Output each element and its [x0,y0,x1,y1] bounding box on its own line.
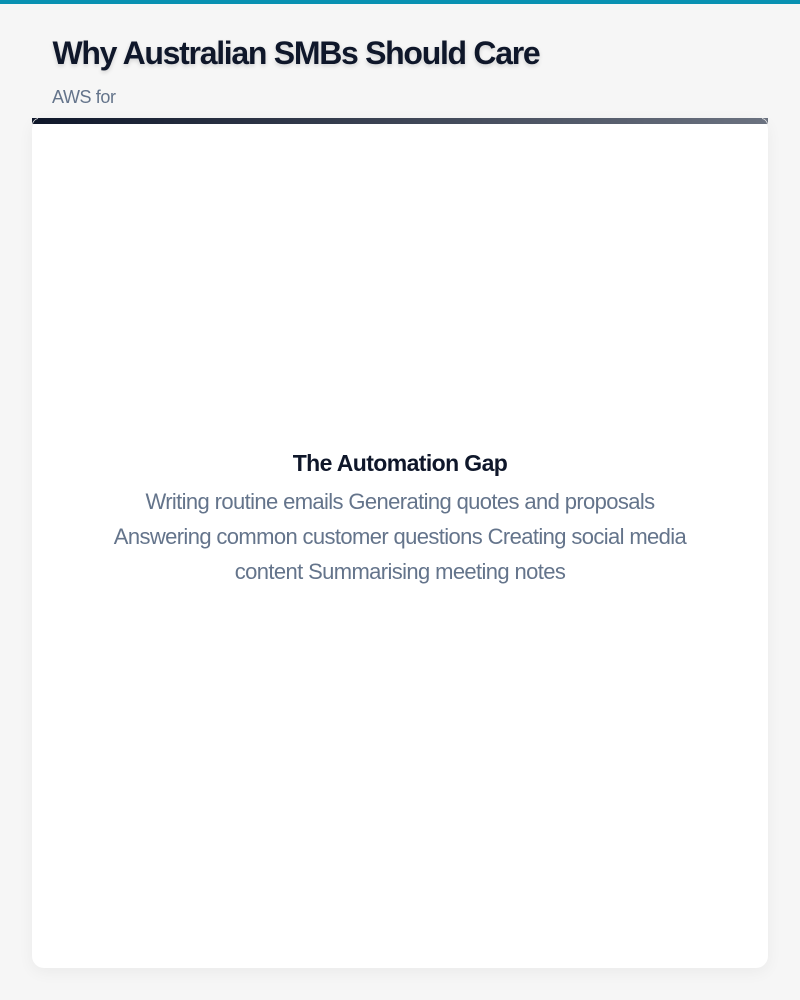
panel: automation gap card [32,118,768,968]
card body text: content Summarising meeting notes [235,559,565,584]
card top gradient bar [32,118,768,124]
title: Why Australian SMBs Should Care [52,35,539,71]
subtitle: AWS for [52,87,116,107]
top accent bar [0,0,800,4]
card body text: Answering common customer questions Creating social media [114,524,686,549]
card body text: Writing routine emails Generating quotes and proposals [145,489,655,514]
card heading: The Automation Gap [293,450,507,476]
card body text [114,489,687,584]
